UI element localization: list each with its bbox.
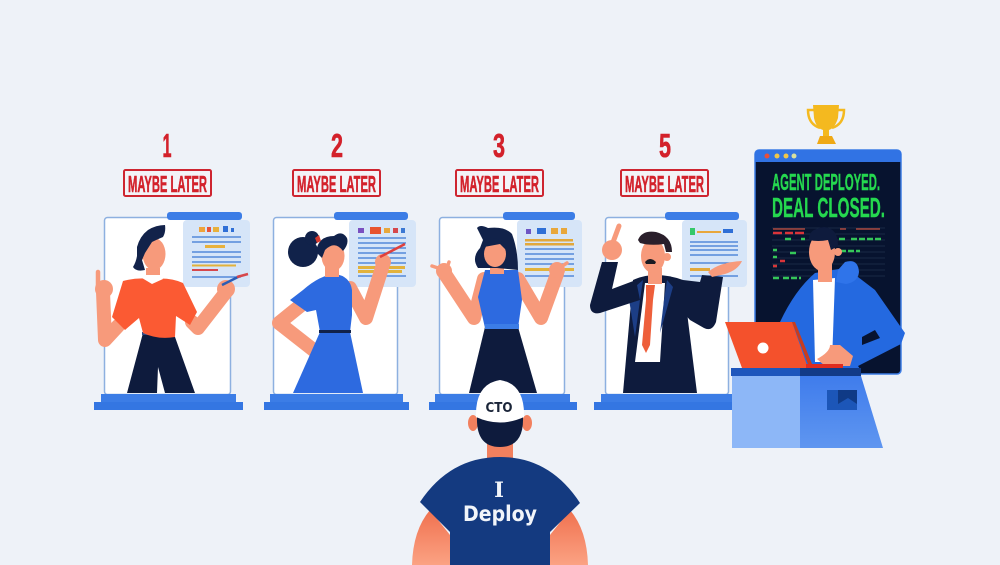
stamp: maybe later — [456, 170, 543, 197]
trophy — [808, 105, 844, 144]
podium — [94, 394, 243, 410]
panel: candidate 1: 1 — [162, 127, 172, 164]
panel: deployed screen — [725, 150, 905, 448]
panel: candidate 1 — [94, 127, 250, 410]
number 2: 2 — [331, 127, 343, 164]
neck — [487, 430, 513, 460]
panel: candidate 2 — [264, 127, 416, 410]
person: sleeveless blue top — [432, 226, 567, 393]
person: blue hoodie — [780, 227, 905, 369]
frame — [274, 212, 408, 394]
headline: AGENT DEPLOYED. — [772, 169, 880, 195]
laptop — [725, 322, 843, 369]
headline: DEAL CLOSED. — [772, 192, 885, 223]
t-shirt: I — [494, 477, 504, 502]
podium — [429, 394, 577, 410]
document — [349, 220, 416, 287]
podium — [594, 394, 736, 410]
hair — [477, 417, 523, 447]
person: suit and tie — [590, 226, 742, 393]
stamp: maybe later — [621, 170, 708, 197]
frame — [440, 212, 575, 394]
number 3: 3 — [493, 127, 505, 164]
stamp: maybe later: MAYBE LATER — [297, 171, 376, 197]
person: CTO seen from behind — [412, 380, 588, 565]
cap: CTO — [486, 401, 512, 416]
document — [517, 220, 582, 287]
document — [183, 220, 250, 287]
panel: candidate 3 — [429, 127, 582, 410]
podium — [264, 394, 409, 410]
headline — [772, 169, 885, 223]
desk — [731, 368, 883, 448]
frame — [104, 212, 242, 394]
stamp: maybe later: MAYBE LATER — [128, 171, 207, 197]
frame — [606, 212, 739, 394]
stamp: maybe later: MAYBE LATER — [460, 171, 539, 197]
number 5: 5 — [659, 127, 671, 164]
stamp: maybe later — [293, 170, 380, 197]
t-shirt — [420, 457, 580, 565]
screen window — [755, 150, 901, 374]
stamp: maybe later — [124, 170, 211, 197]
cap — [476, 380, 524, 422]
person: blue dress — [279, 231, 405, 393]
t-shirt: Deploy — [463, 502, 537, 526]
arms — [412, 510, 588, 565]
panel: candidate 5 — [590, 127, 747, 410]
ears — [468, 415, 532, 431]
stamp: maybe later: MAYBE LATER — [625, 171, 704, 197]
person: orange shirt — [95, 225, 248, 393]
dashboard grid — [772, 228, 885, 278]
document — [682, 220, 747, 287]
